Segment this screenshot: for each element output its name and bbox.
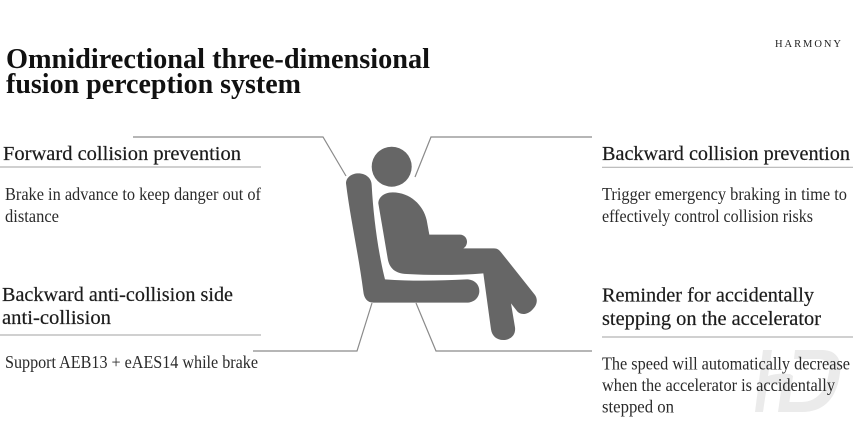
panel: backward anti-collision side anti-collision (0, 284, 261, 372)
panel: reminder for accidentally stepping on the accelerator: when the accelerator is accidentally (602, 375, 835, 395)
icon: seated person (346, 147, 537, 340)
text block: Brake in advance to keep danger out of (5, 184, 261, 204)
title: Omnidirectional three-dimensional (6, 44, 430, 75)
heading: Reminder for accidentally (602, 284, 814, 306)
heading: Backward anti-collision side (2, 284, 233, 306)
heading: Backward collision prevention (602, 143, 850, 165)
watermark: hD logo (755, 350, 840, 412)
heading: Forward collision prevention (3, 143, 241, 165)
icon part: body and legs (378, 192, 537, 340)
panel: backward collision prevention (602, 143, 853, 226)
brand label: HARMONY (775, 39, 841, 50)
panel: reminder for accidentally stepping on the accelerator: stepped on (602, 396, 674, 416)
panel: backward anti-collision side anti-collision: anti-collision (2, 307, 111, 329)
panel: forward collision prevention: distance (5, 206, 59, 226)
title line 2: fusion perception system (6, 69, 301, 100)
text block: Support AEB13 + eAES14 while brake (5, 352, 258, 372)
panel: reminder for accidentally stepping on the accelerator: stepping on the accelerator (602, 308, 821, 330)
connector lines (133, 137, 592, 351)
icon part: head (372, 147, 412, 187)
panel: reminder for accidentally stepping on the accelerator (602, 284, 853, 416)
icon part: seat (346, 173, 479, 303)
panel: forward collision prevention (0, 143, 261, 226)
panel: backward collision prevention: effectively control collision risks (602, 206, 813, 226)
text block: Trigger emergency braking in time to (602, 184, 847, 204)
